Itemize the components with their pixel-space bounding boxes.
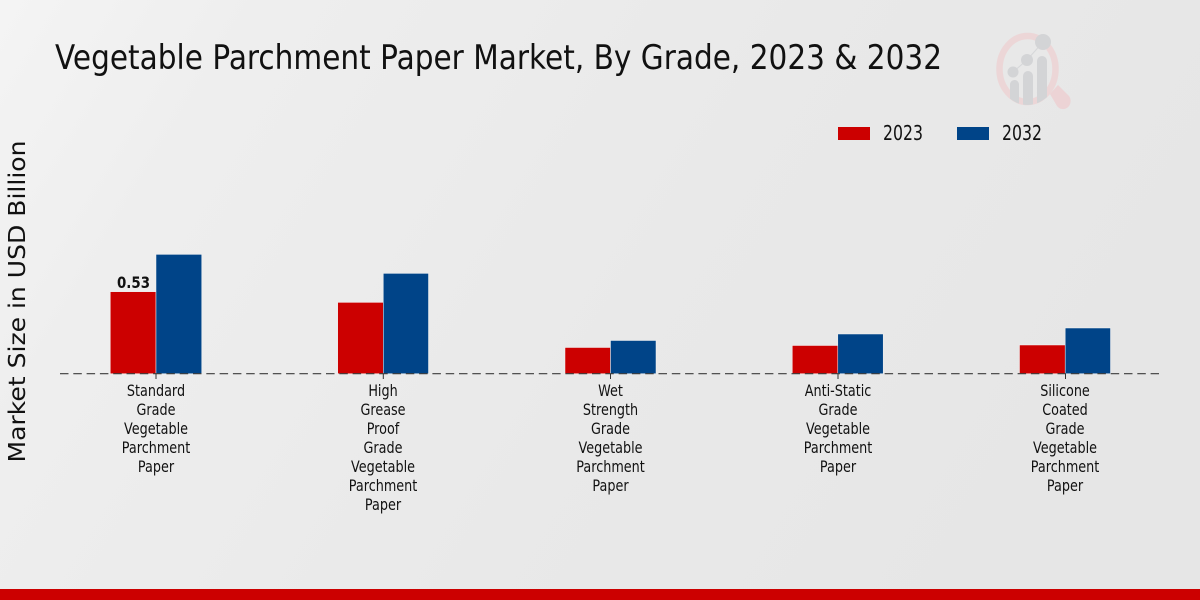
bars: Anti-Static Grade <box>792 334 883 374</box>
legend <box>838 121 1042 145</box>
category label: Wet Strength Grade Vegetable Parchment Paper <box>576 383 645 495</box>
category label: Standard Grade Vegetable Parchment Paper: Parchment <box>122 440 191 457</box>
bars: Standard Grade <box>110 254 202 374</box>
category label: Anti-Static Grade Vegetable Parchment Paper: Paper <box>820 459 856 476</box>
category label: Wet Strength Grade Vegetable Parchment Paper: Parchment <box>576 459 645 476</box>
category label: Standard Grade Vegetable Parchment Paper: Vegetable <box>124 421 188 438</box>
icon: magnifier logo watermark <box>1000 34 1071 110</box>
category label: Silicone Coated Grade Vegetable Parchment Paper: Silicone <box>1040 383 1090 400</box>
category label: High Grease Proof Grade Vegetable Parchment Paper: Parchment <box>349 478 418 495</box>
x-axis dashed baseline <box>60 374 1159 379</box>
category label: Standard Grade Vegetable Parchment Paper: Grade <box>137 402 176 419</box>
category label: Standard Grade Vegetable Parchment Paper: Paper <box>138 459 174 476</box>
category label: Silicone Coated Grade Vegetable Parchment Paper: Vegetable <box>1033 440 1097 457</box>
category label: High Grease Proof Grade Vegetable Parchment Paper: High <box>368 383 398 400</box>
category label: Anti-Static Grade Vegetable Parchment Paper: Vegetable <box>806 421 870 438</box>
category label: High Grease Proof Grade Vegetable Parchment Paper: Grade <box>364 440 403 457</box>
category label: Anti-Static Grade Vegetable Parchment Paper: Anti-Static <box>805 383 871 400</box>
category label: High Grease Proof Grade Vegetable Parchment Paper: Paper <box>365 497 401 514</box>
category label: Wet Strength Grade Vegetable Parchment Paper: Wet <box>598 383 623 400</box>
category label: Anti-Static Grade Vegetable Parchment Paper <box>804 383 873 476</box>
category label: Standard Grade Vegetable Parchment Paper: Standard <box>127 383 185 400</box>
category label: Wet Strength Grade Vegetable Parchment Paper: Strength <box>583 402 638 419</box>
bottom red band <box>0 589 1200 600</box>
category label: High Grease Proof Grade Vegetable Parchment Paper: Proof <box>367 421 400 438</box>
category label: Standard Grade Vegetable Parchment Paper <box>122 383 191 476</box>
category label: Silicone Coated Grade Vegetable Parchment Paper: Grade <box>1046 421 1085 438</box>
legend item: 2032: 2032 <box>1002 121 1042 145</box>
bar chart <box>60 254 1159 379</box>
bars: Wet Strength Grade <box>565 340 656 374</box>
category label: Wet Strength Grade Vegetable Parchment Paper: Vegetable <box>579 440 643 457</box>
category label: High Grease Proof Grade Vegetable Parchment Paper <box>349 383 418 514</box>
category label: Wet Strength Grade Vegetable Parchment Paper: Paper <box>592 478 629 495</box>
title: Vegetable Parchment Paper Market, By Grade, 2023 & 2032 <box>55 38 942 78</box>
category label: High Grease Proof Grade Vegetable Parchment Paper: Grease <box>360 402 406 419</box>
category label: Silicone Coated Grade Vegetable Parchment Paper <box>1031 383 1100 495</box>
legend item: 2023: 2023 <box>883 121 923 145</box>
legend item: 2032 <box>957 121 1042 145</box>
category label: Silicone Coated Grade Vegetable Parchment Paper: Paper <box>1047 478 1083 495</box>
category label: Silicone Coated Grade Vegetable Parchment Paper: Coated <box>1042 402 1088 419</box>
value label: 0.53: 0.53 <box>117 273 150 292</box>
y-axis label: Market Size in USD Billion <box>5 140 31 462</box>
category label: Anti-Static Grade Vegetable Parchment Paper: Grade <box>819 402 858 419</box>
category label: Wet Strength Grade Vegetable Parchment Paper: Grade <box>591 421 630 438</box>
category label: Silicone Coated Grade Vegetable Parchment Paper: Parchment <box>1031 459 1100 476</box>
category label: Anti-Static Grade Vegetable Parchment Paper: Parchment <box>804 440 873 457</box>
bars: Silicone Coated Grade <box>1020 328 1110 374</box>
category label: High Grease Proof Grade Vegetable Parchment Paper: Vegetable <box>351 459 415 476</box>
legend item: 2023 <box>838 121 923 145</box>
bars: High Grease Proof Grade <box>338 273 428 374</box>
